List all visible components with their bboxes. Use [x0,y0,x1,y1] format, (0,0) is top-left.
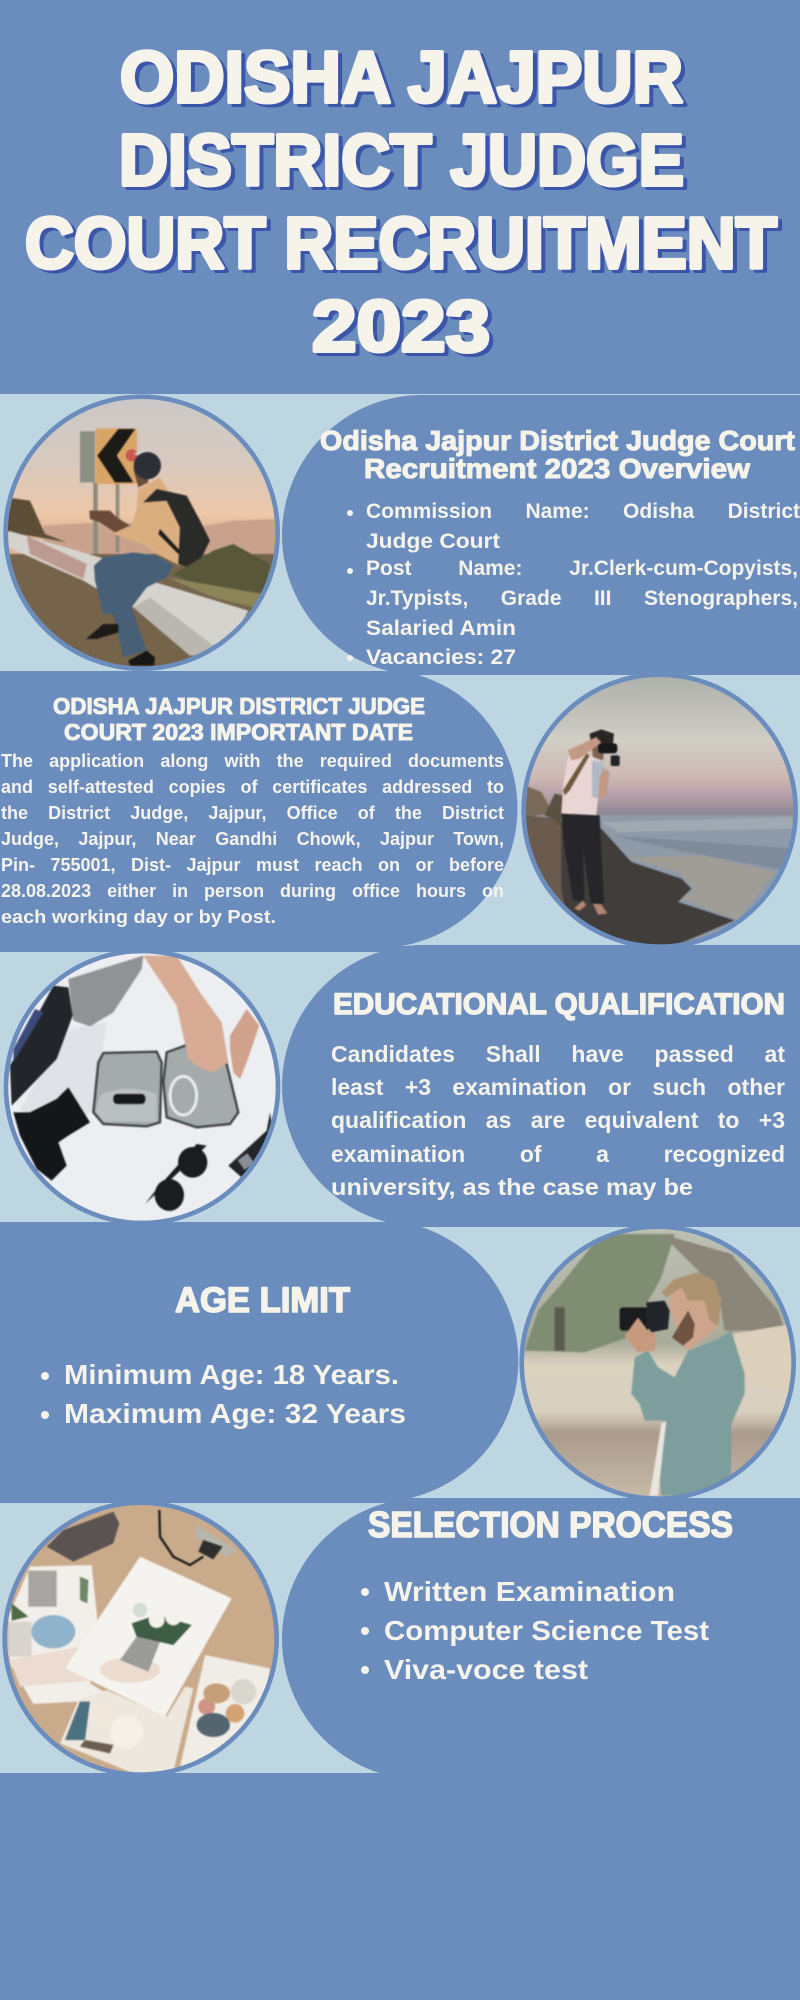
title: 2023 [312,287,490,367]
photo: hiker by road sign [0,394,284,674]
photo: travel gear on bed [0,949,284,1225]
overview bullet list [347,500,800,669]
selection bullet list: Viva-voce test [384,1654,588,1685]
title: ODISHA JAJPUR [120,38,683,118]
qualification paragraph [331,1042,785,1200]
qualification paragraph: qualification as are equivalent to +3 [331,1107,785,1133]
heading: age limit: AGE LIMIT [175,1281,350,1320]
panel: selection process [0,1503,733,1773]
heading: important date: ODISHA JAJPUR DISTRICT JUDGE [53,693,425,719]
age bullet list [41,1359,406,1429]
heading: overview [320,425,795,484]
selection bullet list: Computer Science Test [384,1615,709,1646]
qualification paragraph: university, as the case may be [331,1174,693,1200]
panel: educational qualification [0,945,800,1222]
rounded blue panel [0,1222,518,1500]
qualification paragraph: least +3 examination or such other [331,1074,785,1100]
photo: man with camera [518,1224,800,1500]
age bullet list: Maximum Age: 32 Years [64,1398,406,1429]
photo: photographer on beach [518,672,800,949]
important date paragraph: Judge, Jajpur, Near Gandhi Chowk, Jajpur Town, [1,829,504,849]
title [25,38,782,367]
light band [0,675,800,946]
important date paragraph: Pin- 755001, Dist- Jajpur must reach on or before [1,855,504,875]
heading: overview: Odisha Jajpur District Judge Court [320,425,795,456]
important date paragraph: each working day or by Post. [1,907,276,927]
rounded blue panel [282,1498,800,1780]
panel: age limit [41,1227,800,1498]
heading: educational qualification: EDUCATIONAL QUALIFICATION [333,988,785,1021]
important date paragraph: 28.08.2023 either in person during office hours on [1,881,504,901]
overview bullet list: Jr.Typists, Grade III Stenographers, [366,587,798,610]
panel: recruitment overview [0,394,800,671]
overview bullet list: Commission Name: Odisha District [366,500,800,523]
photo: flat lay of prints [0,1500,284,1776]
qualification paragraph: examination of a recognized [331,1141,785,1167]
rounded blue panel [0,671,517,946]
overview bullet list: Post Name: Jr.Clerk-cum-Copyists, [366,557,798,580]
light band [0,394,800,671]
rounded blue panel [282,945,800,1227]
qualification paragraph: Candidates Shall have passed at [331,1041,785,1067]
light band [0,1227,800,1498]
important date paragraph: and self-attested copies of certificates addressed to [1,777,504,797]
title: DISTRICT JUDGE [119,121,684,201]
heading: important date: COURT 2023 IMPORTANT DATE [64,719,413,745]
important date paragraph: the District Judge, Jajpur, Office of the District [1,803,504,823]
overview bullet list: Salaried Amin [366,617,516,640]
panel: important date [1,675,800,946]
selection bullet list [361,1576,709,1685]
important date paragraph: The application along with the required documents [1,751,504,771]
age bullet list: Minimum Age: 18 Years. [64,1359,399,1390]
overview bullet list: Judge Court [366,530,500,553]
heading: important date [53,693,425,745]
overview bullet list: Vacancies: 27 [366,646,516,669]
light band [0,1503,800,1773]
heading: selection process: SELECTION PROCESS [368,1504,733,1545]
rounded blue panel [282,395,800,675]
selection bullet list: Written Examination [384,1576,675,1607]
heading: overview: Recruitment 2023 Overview [364,453,750,484]
important date paragraph [1,751,504,927]
light band [0,952,800,1222]
